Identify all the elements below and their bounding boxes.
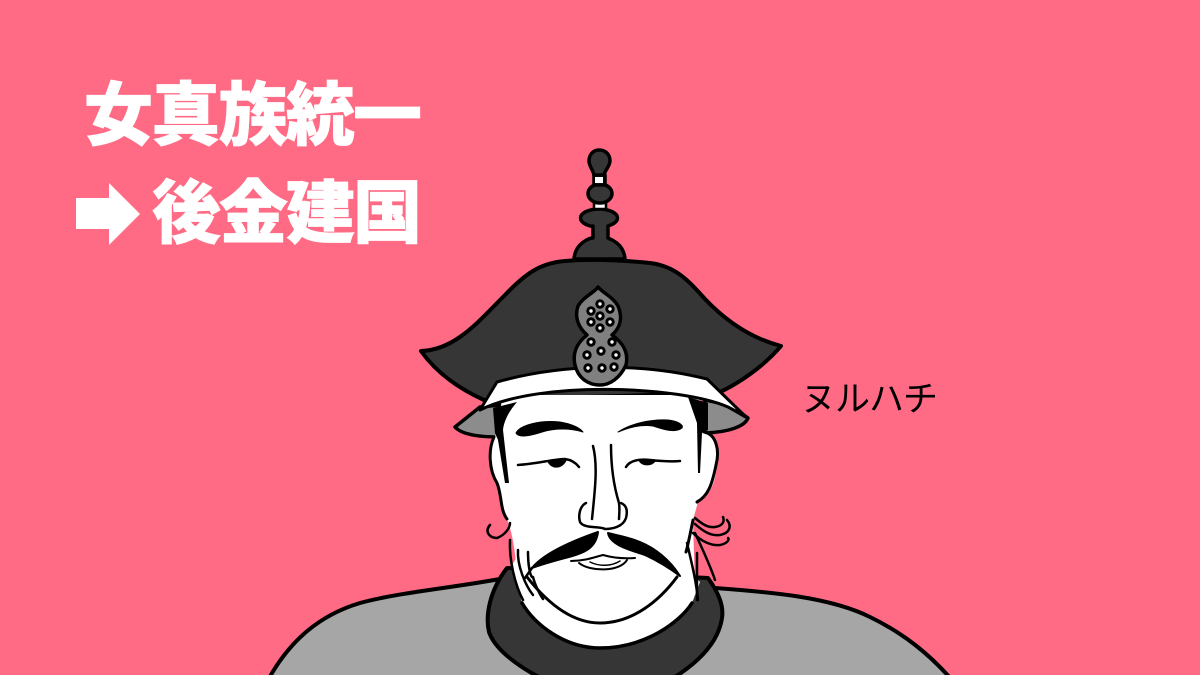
neck	[512, 520, 700, 648]
hat band	[480, 367, 745, 416]
figure: Nurhaci portrait	[268, 150, 952, 675]
robe shoulders	[268, 578, 952, 675]
head	[490, 395, 718, 590]
eyebrows	[516, 422, 583, 436]
nose	[579, 445, 627, 529]
moustache	[532, 532, 680, 576]
gourd ornament	[574, 287, 627, 385]
ear hair right	[693, 517, 730, 545]
arrow icon	[76, 183, 140, 245]
ear hair left	[488, 523, 510, 538]
label: Nurhaci: ヌルハチ	[801, 380, 938, 419]
collar	[488, 568, 722, 675]
heading line 1: 女真族統一	[84, 77, 422, 154]
hat crown	[421, 260, 781, 400]
hat brim underside left	[455, 405, 500, 437]
heading line 2: 後金建国	[152, 175, 422, 252]
ornament beads	[584, 301, 619, 371]
face outline	[490, 432, 718, 623]
hat brim underside right	[705, 400, 748, 433]
hair sides	[493, 402, 517, 483]
title	[76, 77, 422, 252]
hat finial	[574, 150, 625, 259]
whiskers	[510, 533, 715, 600]
eyes	[518, 459, 680, 467]
mouth	[571, 555, 635, 569]
